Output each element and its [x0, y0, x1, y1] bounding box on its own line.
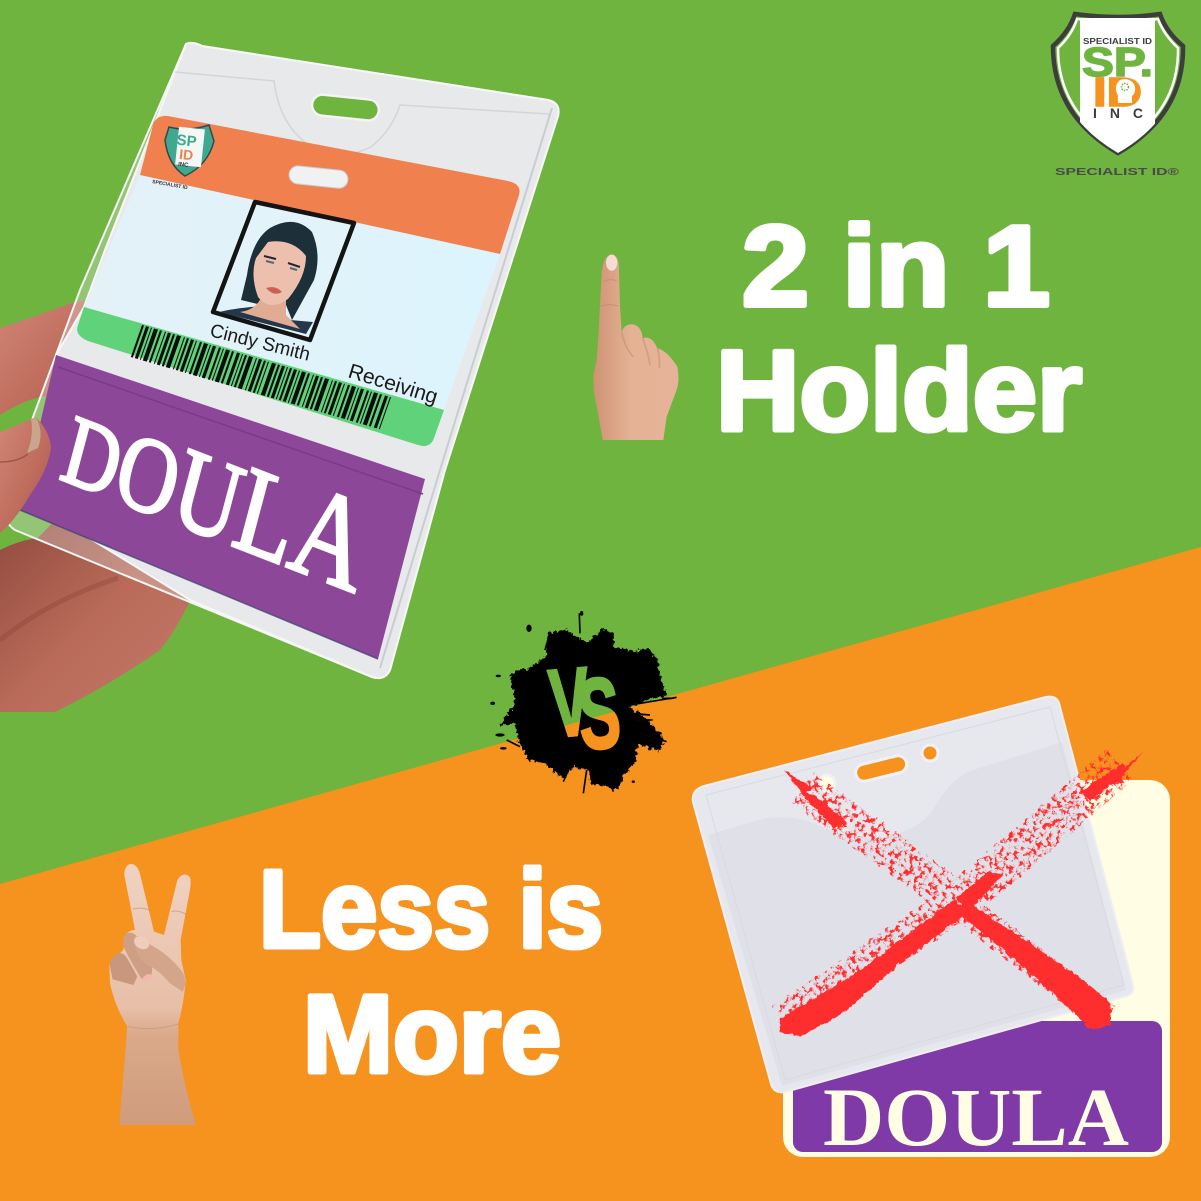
logo INC: INC: [1093, 105, 1143, 121]
cream card backing: [783, 780, 1170, 1157]
solid brush core: [780, 751, 1143, 1037]
red painted X: [780, 751, 1143, 1037]
icon: hand pointing one finger: [593, 254, 679, 440]
photo: plain badge holder with crossed out DOULA card: [693, 697, 1170, 1163]
logo wordmark: SPECIALIST ID®: [1055, 167, 1180, 178]
VS lettering: S: [574, 656, 625, 771]
card mini logo: [165, 125, 214, 176]
heading: Less is: Less is: [259, 848, 603, 971]
heading: More: More: [303, 973, 561, 1096]
logo small heading: SPECIALIST ID: [1083, 37, 1152, 46]
clear vinyl pouch, opaque body: [56, 43, 559, 678]
logo: Specialist ID shield: [1053, 14, 1183, 178]
shoulders: [219, 306, 313, 334]
icon: hand showing two fingers: [109, 864, 196, 1125]
shield outline: [1053, 14, 1183, 153]
card slot: [288, 165, 349, 189]
logo ID mark: ID: [1093, 69, 1142, 115]
clear vinyl pouch, translucent edge: [7, 43, 559, 678]
card mini logo: INC: [178, 162, 189, 169]
photo: hand holding 2 in 1 badge holder: [0, 43, 559, 712]
neck and chest: [240, 296, 300, 329]
face: [253, 241, 306, 305]
card orange header: [140, 116, 520, 254]
clip hole right: [922, 745, 938, 761]
barcode: [136, 341, 386, 414]
ink splat: [490, 611, 677, 793]
hand: upper finger and lower hand: [0, 296, 195, 712]
hand: middle finger gripping holder: [0, 417, 51, 533]
lanyard slot in pouch: [311, 94, 380, 121]
speckled brush bands: [783, 765, 1120, 1022]
purple DOULA strip: [793, 1021, 1162, 1152]
shield white column: [1080, 18, 1155, 153]
card mini logo: SP: [176, 132, 197, 151]
logo SP mark: SP.: [1082, 39, 1153, 85]
DOULA label: DOULA: [823, 1071, 1129, 1163]
VS lettering: V: [545, 647, 594, 757]
lanyard slot: [854, 754, 908, 783]
heading: 2 in 1: 2 in 1: [742, 204, 1050, 330]
card white body: [84, 175, 500, 410]
hair: [241, 222, 318, 320]
clear vinyl holder: [693, 697, 1133, 1092]
background: orange diagonal bottom: [0, 547, 1201, 1201]
ID card: [77, 116, 520, 446]
department label: Receiving: [346, 360, 440, 409]
heading: Holder: Holder: [716, 328, 1082, 455]
card mini logo: ID: [178, 146, 194, 163]
ID photo: woman portrait: [213, 202, 354, 340]
purple DOULA badge buddy: [20, 355, 425, 659]
VS ink splat badge: [490, 611, 677, 793]
ID card: SPECIALIST ID: [152, 179, 188, 191]
name label: Cindy Smith: [208, 320, 312, 366]
card green footer: [77, 307, 444, 446]
DOULA label: DOULA: [51, 367, 384, 621]
clip hole left: [819, 775, 835, 791]
logo head icon: [1116, 79, 1135, 103]
